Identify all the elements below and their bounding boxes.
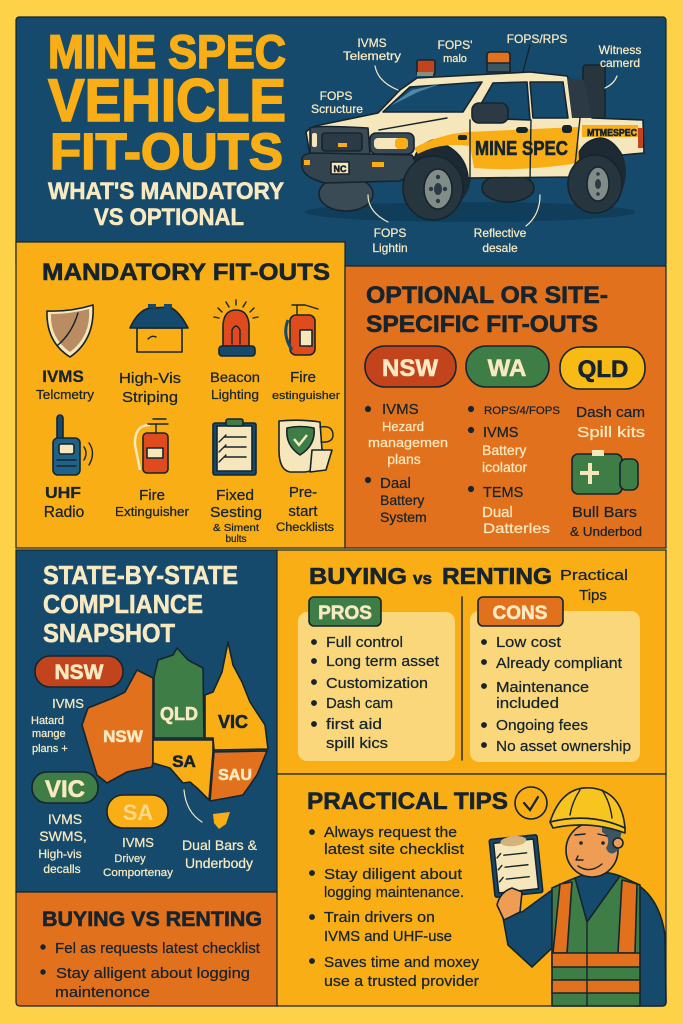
- heading: state compliance snapshot: SNAPSHOT: [43, 618, 175, 648]
- card: cons: [470, 597, 640, 762]
- label: IVMS telemetry: [36, 367, 95, 402]
- illustration: worker with clipboard: [489, 788, 666, 1006]
- bullet list: [40, 940, 261, 1001]
- icon: beacon light: [214, 300, 258, 356]
- label: IVMS telemetry: IVMS: [42, 367, 84, 386]
- list: WA: TEMS: [483, 485, 523, 501]
- icon: check circle: [515, 787, 547, 819]
- tips list: Always request the: [324, 824, 457, 841]
- list: WA: ROPS/4/FOPS: [484, 405, 560, 417]
- tips list: use a trusted provider: [324, 973, 479, 990]
- list: QLD: Dash cam: [576, 405, 645, 421]
- label: beacon lighting: Lighting: [211, 387, 259, 402]
- illustration: mine spec truck: NC: [334, 164, 347, 174]
- callout labels: Reflective: [474, 226, 527, 240]
- note: NSW: plans +: [32, 743, 68, 755]
- label: UHF radio: UHF: [45, 485, 81, 502]
- label: pre-start checklists: Pre-: [289, 484, 317, 501]
- list: QLD: & Underbod: [570, 524, 642, 539]
- badge: WA: [466, 346, 549, 387]
- tips list: Saves time and moxey: [324, 954, 479, 971]
- illustration: mine spec truck: MTMESPEC: [587, 128, 637, 139]
- callout labels: FOPS: [374, 226, 406, 240]
- bullet list: Fel as requests latest checklist: [55, 940, 261, 957]
- map of Australia: NSW: [103, 727, 144, 746]
- label: beacon lighting: [210, 369, 260, 402]
- note: dual bars: Dual Bars &: [182, 837, 258, 853]
- badge: VIC: [32, 772, 98, 803]
- bullet list: Stay alligent about logging: [56, 965, 250, 982]
- card: cons: No asset ownership: [496, 738, 631, 755]
- badge: SA: SA: [123, 800, 153, 825]
- label: practical tips: Practical: [560, 567, 628, 584]
- note: NSW: [31, 696, 84, 755]
- label: practical tips: Tips: [579, 587, 607, 604]
- heading: buying vs renting: vs: [413, 569, 432, 588]
- label: IVMS telemetry: Telcmetry: [36, 387, 95, 402]
- callout labels: FOPS: [320, 89, 352, 103]
- heading: mandatory fit-outs: MANDATORY FIT-OUTS: [42, 259, 330, 286]
- map of Australia: QLD: [160, 704, 198, 724]
- callout labels: Lightin: [372, 241, 408, 255]
- icon: clipboard: [213, 419, 256, 475]
- panel: buying vs renting pros and cons: [277, 550, 666, 774]
- note: SA: [103, 835, 174, 879]
- heading: practical tips: PRACTICAL TIPS: [307, 788, 508, 815]
- map of Australia: SAU: [218, 767, 252, 784]
- title: MINE SPEC: [48, 25, 286, 78]
- callout labels: IVMS: [357, 36, 387, 50]
- label: UHF radio: Radio: [44, 504, 84, 521]
- label: fixed seating and bulkheads: [210, 487, 262, 545]
- badge: NSW: [35, 656, 123, 687]
- list: NSW: [365, 401, 448, 525]
- list: NSW: Battery: [380, 492, 424, 508]
- label: beacon lighting: Beacon: [210, 369, 260, 385]
- badge: QLD: QLD: [578, 356, 628, 383]
- list: NSW: plans: [387, 451, 421, 467]
- heading: buying vs renting: RENTING: [442, 563, 552, 589]
- callout labels: Scructure: [311, 102, 363, 116]
- card: cons: Maintenance: [496, 679, 589, 696]
- callout labels: [311, 32, 641, 255]
- bullet list: maintenonce: [55, 984, 150, 1001]
- card: cons: CONS: [493, 603, 547, 624]
- icon: fire extinguisher: [286, 305, 318, 355]
- badge: NSW: NSW: [382, 355, 438, 382]
- note: dual bars: Underbody: [185, 855, 253, 871]
- card: pros: Long term asset: [326, 653, 440, 670]
- label: fixed seating and bulkheads: bults: [225, 534, 247, 545]
- label: fire extinguisher: [272, 369, 340, 402]
- icon: UHF radio: [53, 415, 92, 475]
- card: pros: PROS: [318, 603, 372, 624]
- note: NSW: IVMS: [52, 696, 84, 711]
- list: NSW: Hezard: [382, 419, 424, 434]
- callout labels: FOPS': [438, 38, 472, 52]
- label: UHF radio: [44, 485, 84, 521]
- title: FIT-OUTS: [50, 123, 283, 180]
- illustration: mine spec truck: [302, 45, 644, 222]
- panel: mandatory fit-outs: [16, 242, 345, 548]
- label: fixed seating and bulkheads: & Siment: [213, 523, 259, 534]
- tips list: logging maintenance.: [324, 884, 464, 901]
- note: VIC: [38, 811, 87, 876]
- map of Australia: VIC: [218, 712, 248, 732]
- label: pre-start checklists: [276, 484, 334, 534]
- list: NSW: Daal: [380, 475, 411, 492]
- heading: buying vs renting: BUYING VS RENTING: [42, 908, 262, 931]
- badge: NSW: NSW: [54, 661, 104, 684]
- card: cons: Already compliant: [496, 655, 623, 672]
- label: fire extinguisher: estinguisher: [272, 390, 340, 402]
- tips list: latest site checklist: [324, 841, 465, 858]
- list: WA: icolator: [482, 459, 527, 475]
- panel: state-by-state snapshot: [16, 550, 277, 892]
- note: dual bars: [182, 837, 258, 871]
- label: high-vis striping: High-Vis: [119, 370, 181, 387]
- label: fire extinguisher: Fire: [290, 369, 316, 386]
- label: fire extinguisher: Extinguisher: [115, 504, 190, 519]
- heading: buying vs renting: BUYING: [309, 563, 407, 589]
- subtitle: VS OPTIONAL: [94, 204, 244, 231]
- list: WA: Datterles: [483, 520, 550, 536]
- note: SA: Comportenay: [103, 867, 174, 879]
- note: VIC: decalls: [43, 862, 81, 876]
- label: pre-start checklists: start: [288, 503, 318, 520]
- list: NSW: IVMS: [382, 401, 419, 418]
- list: NSW: managemen: [368, 435, 448, 450]
- note: SA: Drivey: [114, 853, 146, 865]
- illustration: mine spec truck: MINE SPEC: [475, 138, 568, 160]
- heading: state compliance snapshot: STATE-BY-STATE: [43, 560, 238, 590]
- card: pros: first aid: [326, 716, 382, 733]
- note: VIC: High-vis: [38, 847, 82, 861]
- icon: fire extinguisher: [135, 419, 168, 473]
- panel: practical tips: [277, 774, 666, 1006]
- list: WA: Battery: [482, 442, 526, 458]
- list: WA: Dual: [482, 504, 513, 521]
- card: pros: spill kics: [326, 735, 388, 752]
- card: pros: [298, 597, 455, 761]
- subtitle: [48, 178, 284, 231]
- card: cons: included: [496, 695, 559, 712]
- badge: QLD: [560, 347, 645, 389]
- badge: VIC: VIC: [45, 776, 85, 803]
- heading: state compliance snapshot: COMPLIANCE: [43, 589, 203, 619]
- heading: optional fit-outs: OPTIONAL OR SITE-: [366, 282, 608, 309]
- list: WA: [468, 405, 560, 536]
- list: QLD: [570, 405, 645, 539]
- icon: first aid spill kit: [572, 450, 638, 494]
- map of Australia: [82, 642, 268, 829]
- callout labels: Witness: [599, 43, 641, 57]
- card: pros: Dash cam: [326, 695, 393, 712]
- icon: shield: [47, 305, 93, 357]
- tips list: IVMS and UHF-use: [324, 928, 452, 945]
- tips list: Train drivers on: [324, 909, 435, 926]
- note: NSW: Hatard: [31, 715, 64, 727]
- card: pros: Full control: [326, 634, 403, 651]
- panel: optional or site-specific fit-outs: [345, 266, 666, 548]
- callout labels: desale: [482, 241, 518, 255]
- callout labels: malo: [443, 53, 467, 65]
- badge: SA: [107, 795, 168, 828]
- callout labels: camerd: [600, 56, 640, 70]
- label: high-vis striping: Striping: [122, 389, 178, 406]
- label: fixed seating and bulkheads: Sesting: [210, 504, 262, 521]
- label: fire extinguisher: Fire: [139, 487, 165, 504]
- label: high-vis striping: [119, 370, 181, 406]
- panel: header: [16, 17, 666, 267]
- heading: state compliance snapshot: [43, 560, 238, 648]
- note: VIC: SWMS,: [39, 828, 87, 844]
- badge: NSW: [365, 346, 456, 387]
- icon: high-vis striping: [130, 304, 188, 352]
- icon: pre-start checklist mug: [279, 420, 333, 472]
- note: VIC: IVMS: [48, 811, 82, 827]
- label: practical tips: [560, 567, 628, 604]
- subtitle: WHAT'S MANDATORY: [48, 178, 284, 205]
- list: WA: IVMS: [483, 425, 518, 441]
- list: QLD: Spill kits: [577, 425, 645, 441]
- label: pre-start checklists: Checklists: [276, 522, 334, 534]
- note: NSW: mange: [32, 728, 66, 740]
- list: QLD: Bull Bars: [572, 505, 637, 521]
- card: pros: Customization: [326, 675, 428, 692]
- map of Australia: SA: [172, 752, 196, 771]
- heading: optional fit-outs: SPECIFIC FIT-OUTS: [366, 311, 598, 338]
- tips list: Stay diligent about: [324, 866, 463, 883]
- tips list: [309, 824, 479, 990]
- callout labels: Telemetry: [343, 49, 401, 63]
- callout labels: FOPS/RPS: [507, 32, 567, 46]
- heading: buying vs renting: [309, 563, 552, 589]
- panel: buying vs renting summary: [16, 892, 277, 1006]
- title: VEHICLE: [48, 67, 286, 134]
- title: [48, 25, 286, 180]
- heading: optional fit-outs: [366, 282, 608, 338]
- card: cons: Ongoing fees: [496, 717, 588, 734]
- label: fixed seating and bulkheads: Fixed: [216, 487, 254, 504]
- list: NSW: System: [380, 509, 427, 525]
- note: SA: IVMS: [122, 835, 154, 850]
- label: fire extinguisher: [115, 487, 190, 519]
- badge: WA: WA: [488, 355, 526, 382]
- card: cons: Low cost: [496, 634, 562, 651]
